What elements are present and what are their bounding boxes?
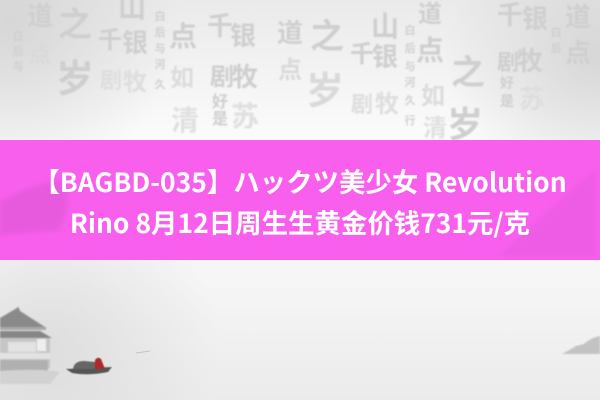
- calligraphy backdrop: 点: [169, 15, 197, 55]
- title: 【BAGBD-035】ハックツ美少女 Revolution: [33, 161, 567, 200]
- calligraphy backdrop: 后: [404, 40, 416, 56]
- calligraphy backdrop: 好: [212, 88, 228, 112]
- title: Rino 8月12日周生生黄金价钱731元/克: [70, 202, 530, 241]
- calligraphy backdrop: 点: [278, 50, 302, 85]
- calligraphy backdrop: [12, 0, 591, 148]
- calligraphy backdrop: 牧: [375, 84, 399, 119]
- calligraphy backdrop: 岁: [56, 48, 94, 103]
- pavilion: [0, 307, 60, 384]
- calligraphy backdrop: 白: [550, 24, 562, 40]
- calligraphy backdrop: 银: [122, 23, 148, 60]
- calligraphy backdrop: 久: [154, 76, 166, 92]
- calligraphy backdrop: 是: [500, 91, 514, 111]
- calligraphy backdrop: 后: [12, 43, 24, 59]
- calligraphy backdrop: 后: [154, 24, 166, 40]
- calligraphy backdrop: 河: [404, 74, 416, 90]
- calligraphy backdrop: 清: [171, 99, 199, 139]
- calligraphy backdrop: 与: [404, 58, 416, 74]
- calligraphy backdrop: 牧: [517, 41, 543, 78]
- calligraphy backdrop: 与: [154, 40, 166, 56]
- calligraphy backdrop: 河: [154, 56, 166, 72]
- calligraphy backdrop: 如: [421, 76, 445, 111]
- calligraphy backdrop: 岁: [447, 96, 483, 148]
- calligraphy backdrop: 久: [404, 92, 416, 108]
- calligraphy backdrop: 之: [310, 9, 344, 58]
- calligraphy backdrop: 点: [29, 37, 51, 69]
- boat with red-robed figure: [66, 358, 112, 374]
- calligraphy backdrop: 如: [170, 58, 194, 93]
- calligraphy backdrop: 银: [372, 37, 398, 74]
- calligraphy backdrop: 白: [12, 28, 24, 44]
- calligraphy backdrop: 好: [500, 73, 514, 93]
- calligraphy backdrop: 千: [207, 6, 233, 43]
- title: [33, 161, 567, 241]
- calligraphy backdrop: 银: [230, 16, 256, 53]
- calligraphy backdrop: 千: [350, 34, 374, 69]
- calligraphy backdrop: 清: [423, 108, 447, 143]
- calligraphy backdrop: 银: [522, 0, 548, 36]
- calligraphy backdrop: 之: [451, 45, 485, 94]
- calligraphy backdrop: 点: [416, 29, 444, 69]
- calligraphy backdrop: 点: [565, 33, 591, 70]
- calligraphy backdrop: 千: [98, 20, 122, 55]
- calligraphy backdrop: 牧: [123, 62, 147, 97]
- calligraphy backdrop: 与: [12, 58, 24, 74]
- calligraphy backdrop: 剧: [497, 45, 519, 77]
- calligraphy backdrop: 剧: [351, 87, 373, 119]
- calligraphy backdrop: 剧: [100, 63, 122, 95]
- calligraphy backdrop: 山: [371, 5, 399, 45]
- calligraphy backdrop: 道: [277, 13, 303, 50]
- pink banner: [0, 140, 600, 260]
- faint washes inside banner: [0, 180, 592, 252]
- calligraphy backdrop: 行: [404, 112, 416, 128]
- calligraphy backdrop: 剧: [210, 57, 234, 92]
- calligraphy backdrop: 白: [154, 8, 166, 24]
- calligraphy backdrop: 后: [550, 40, 562, 56]
- calligraphy backdrop: 苏: [519, 79, 545, 116]
- calligraphy backdrop: 苏: [231, 95, 259, 135]
- calligraphy backdrop: 是: [212, 105, 228, 129]
- distant hill, lower right: [562, 336, 600, 354]
- calligraphy backdrop: 白: [404, 22, 416, 38]
- calligraphy backdrop: 牧: [232, 57, 258, 94]
- calligraphy backdrop: 岁: [306, 60, 344, 115]
